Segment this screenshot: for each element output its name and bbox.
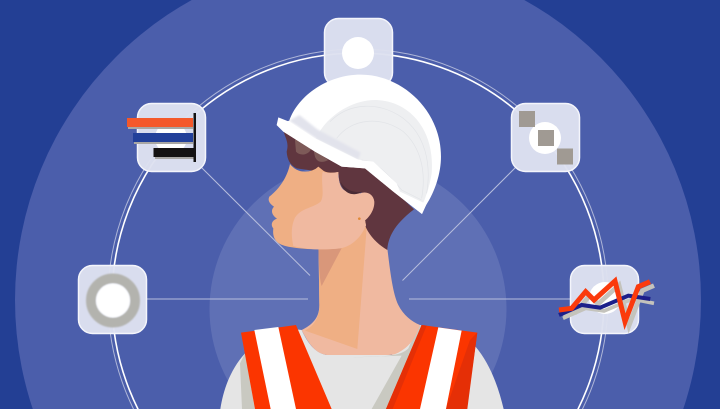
neck xyxy=(302,217,420,355)
face highlight xyxy=(292,172,366,249)
icon: top tile with circle xyxy=(324,18,392,86)
shirt xyxy=(220,325,504,409)
hair curl xyxy=(339,168,373,193)
connector lines xyxy=(147,166,570,299)
panel: inner halo circle xyxy=(210,160,506,409)
face xyxy=(269,164,366,249)
figure: worker xyxy=(220,75,504,409)
hard hat dome xyxy=(277,75,441,214)
ear xyxy=(358,192,374,221)
hard hat panel xyxy=(316,100,432,203)
orbit rings xyxy=(108,49,608,409)
icon: scatter squares tile xyxy=(512,104,580,172)
hard hat brim xyxy=(277,117,426,214)
icon: horizontal bar chart tile xyxy=(127,104,206,172)
head xyxy=(269,75,441,250)
hard hat shadow xyxy=(289,115,361,159)
hair xyxy=(283,128,414,250)
icon: donut tile xyxy=(78,266,146,334)
hair highlights xyxy=(295,137,312,155)
icon: line chart tile xyxy=(559,266,654,334)
safety vest xyxy=(241,325,477,409)
